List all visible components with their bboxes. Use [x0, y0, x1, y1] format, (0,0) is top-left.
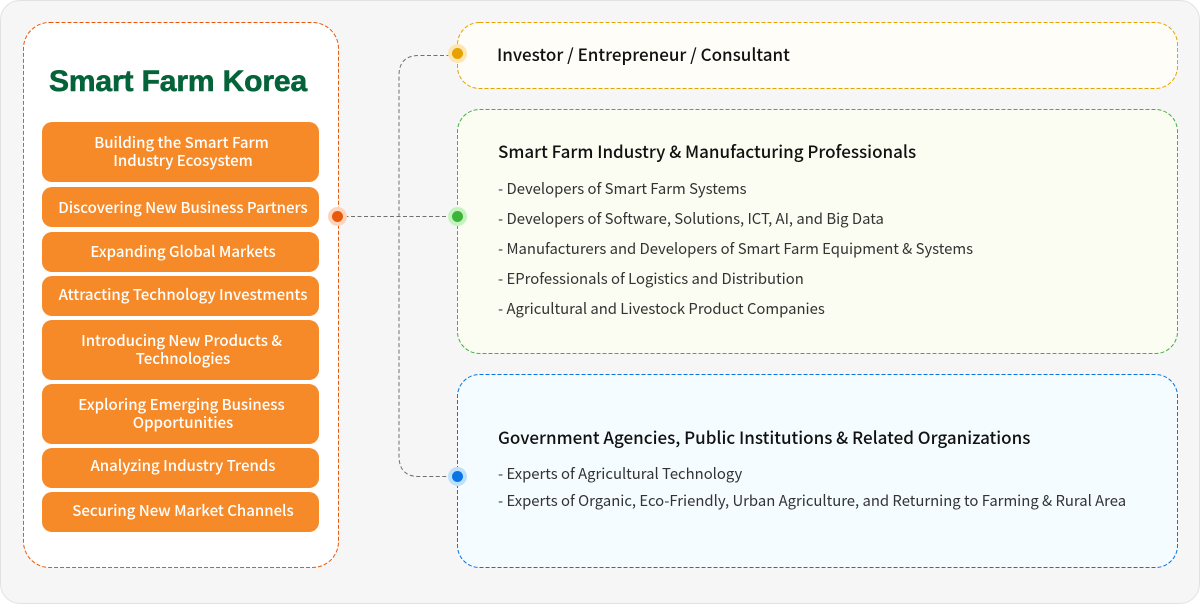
panel: Smart Farm Korea benefits [23, 22, 339, 568]
text: government list: - Experts of Agricultural Technology [498, 463, 742, 484]
button: global markets [42, 232, 319, 272]
dot: orange connector [328, 207, 347, 226]
logo: Smart Farm Korea: Smart Farm Korea [49, 65, 307, 98]
panel: investor [457, 22, 1178, 89]
text: industry list: - Manufacturers and Developers of Smart Farm Equipment & Systems [498, 238, 973, 259]
button: opportunities [42, 384, 319, 444]
button: partners: Discovering New Business Partners [58, 197, 308, 218]
button: market channels: Securing New Market Channels [72, 500, 294, 521]
panel: industry professionals [457, 109, 1178, 354]
button: market channels [42, 492, 319, 532]
button: partners [42, 187, 319, 227]
button: ecosystem: Building the Smart Farm [94, 132, 269, 153]
heading: government: Government Agencies, Public Institutions & Related Organizations [498, 424, 1030, 449]
button: trends: Analyzing Industry Trends [90, 455, 276, 476]
text: industry list: - Developers of Software, Solutions, ICT, AI, and Big Data [498, 208, 884, 229]
button: global markets: Expanding Global Markets [90, 241, 276, 262]
heading: investor: Investor / Entrepreneur / Consultant [497, 41, 790, 66]
button: opportunities: Exploring Emerging Business [78, 394, 285, 415]
button: new products [42, 320, 319, 380]
button: new products: Introducing New Products & [81, 330, 282, 351]
button: new products: Technologies [136, 348, 230, 369]
button: trends [42, 448, 319, 488]
text: industry list: - Agricultural and Livestock Product Companies [498, 298, 825, 319]
text: industry list: - Developers of Smart Farm Systems [498, 178, 747, 199]
text: government list: - Experts of Organic, Eco-Friendly, Urban Agriculture, and Returning to Farming & Rural Area [498, 490, 1126, 511]
button: investments [42, 276, 319, 316]
text: industry list [498, 178, 973, 319]
dot: green connector [448, 207, 467, 226]
button: ecosystem [42, 122, 319, 182]
dot: yellow connector [448, 44, 467, 63]
dot: blue connector [448, 467, 467, 486]
button: investments: Attracting Technology Investments [59, 284, 307, 305]
heading: industry professionals: Smart Farm Industry & Manufacturing Professionals [498, 138, 916, 163]
button: ecosystem: Industry Ecosystem [113, 150, 253, 171]
button: opportunities: Opportunities [133, 412, 233, 433]
panel: government [457, 374, 1178, 568]
text: industry list: - EProfessionals of Logistics and Distribution [498, 268, 804, 289]
text: government list [498, 463, 1126, 511]
